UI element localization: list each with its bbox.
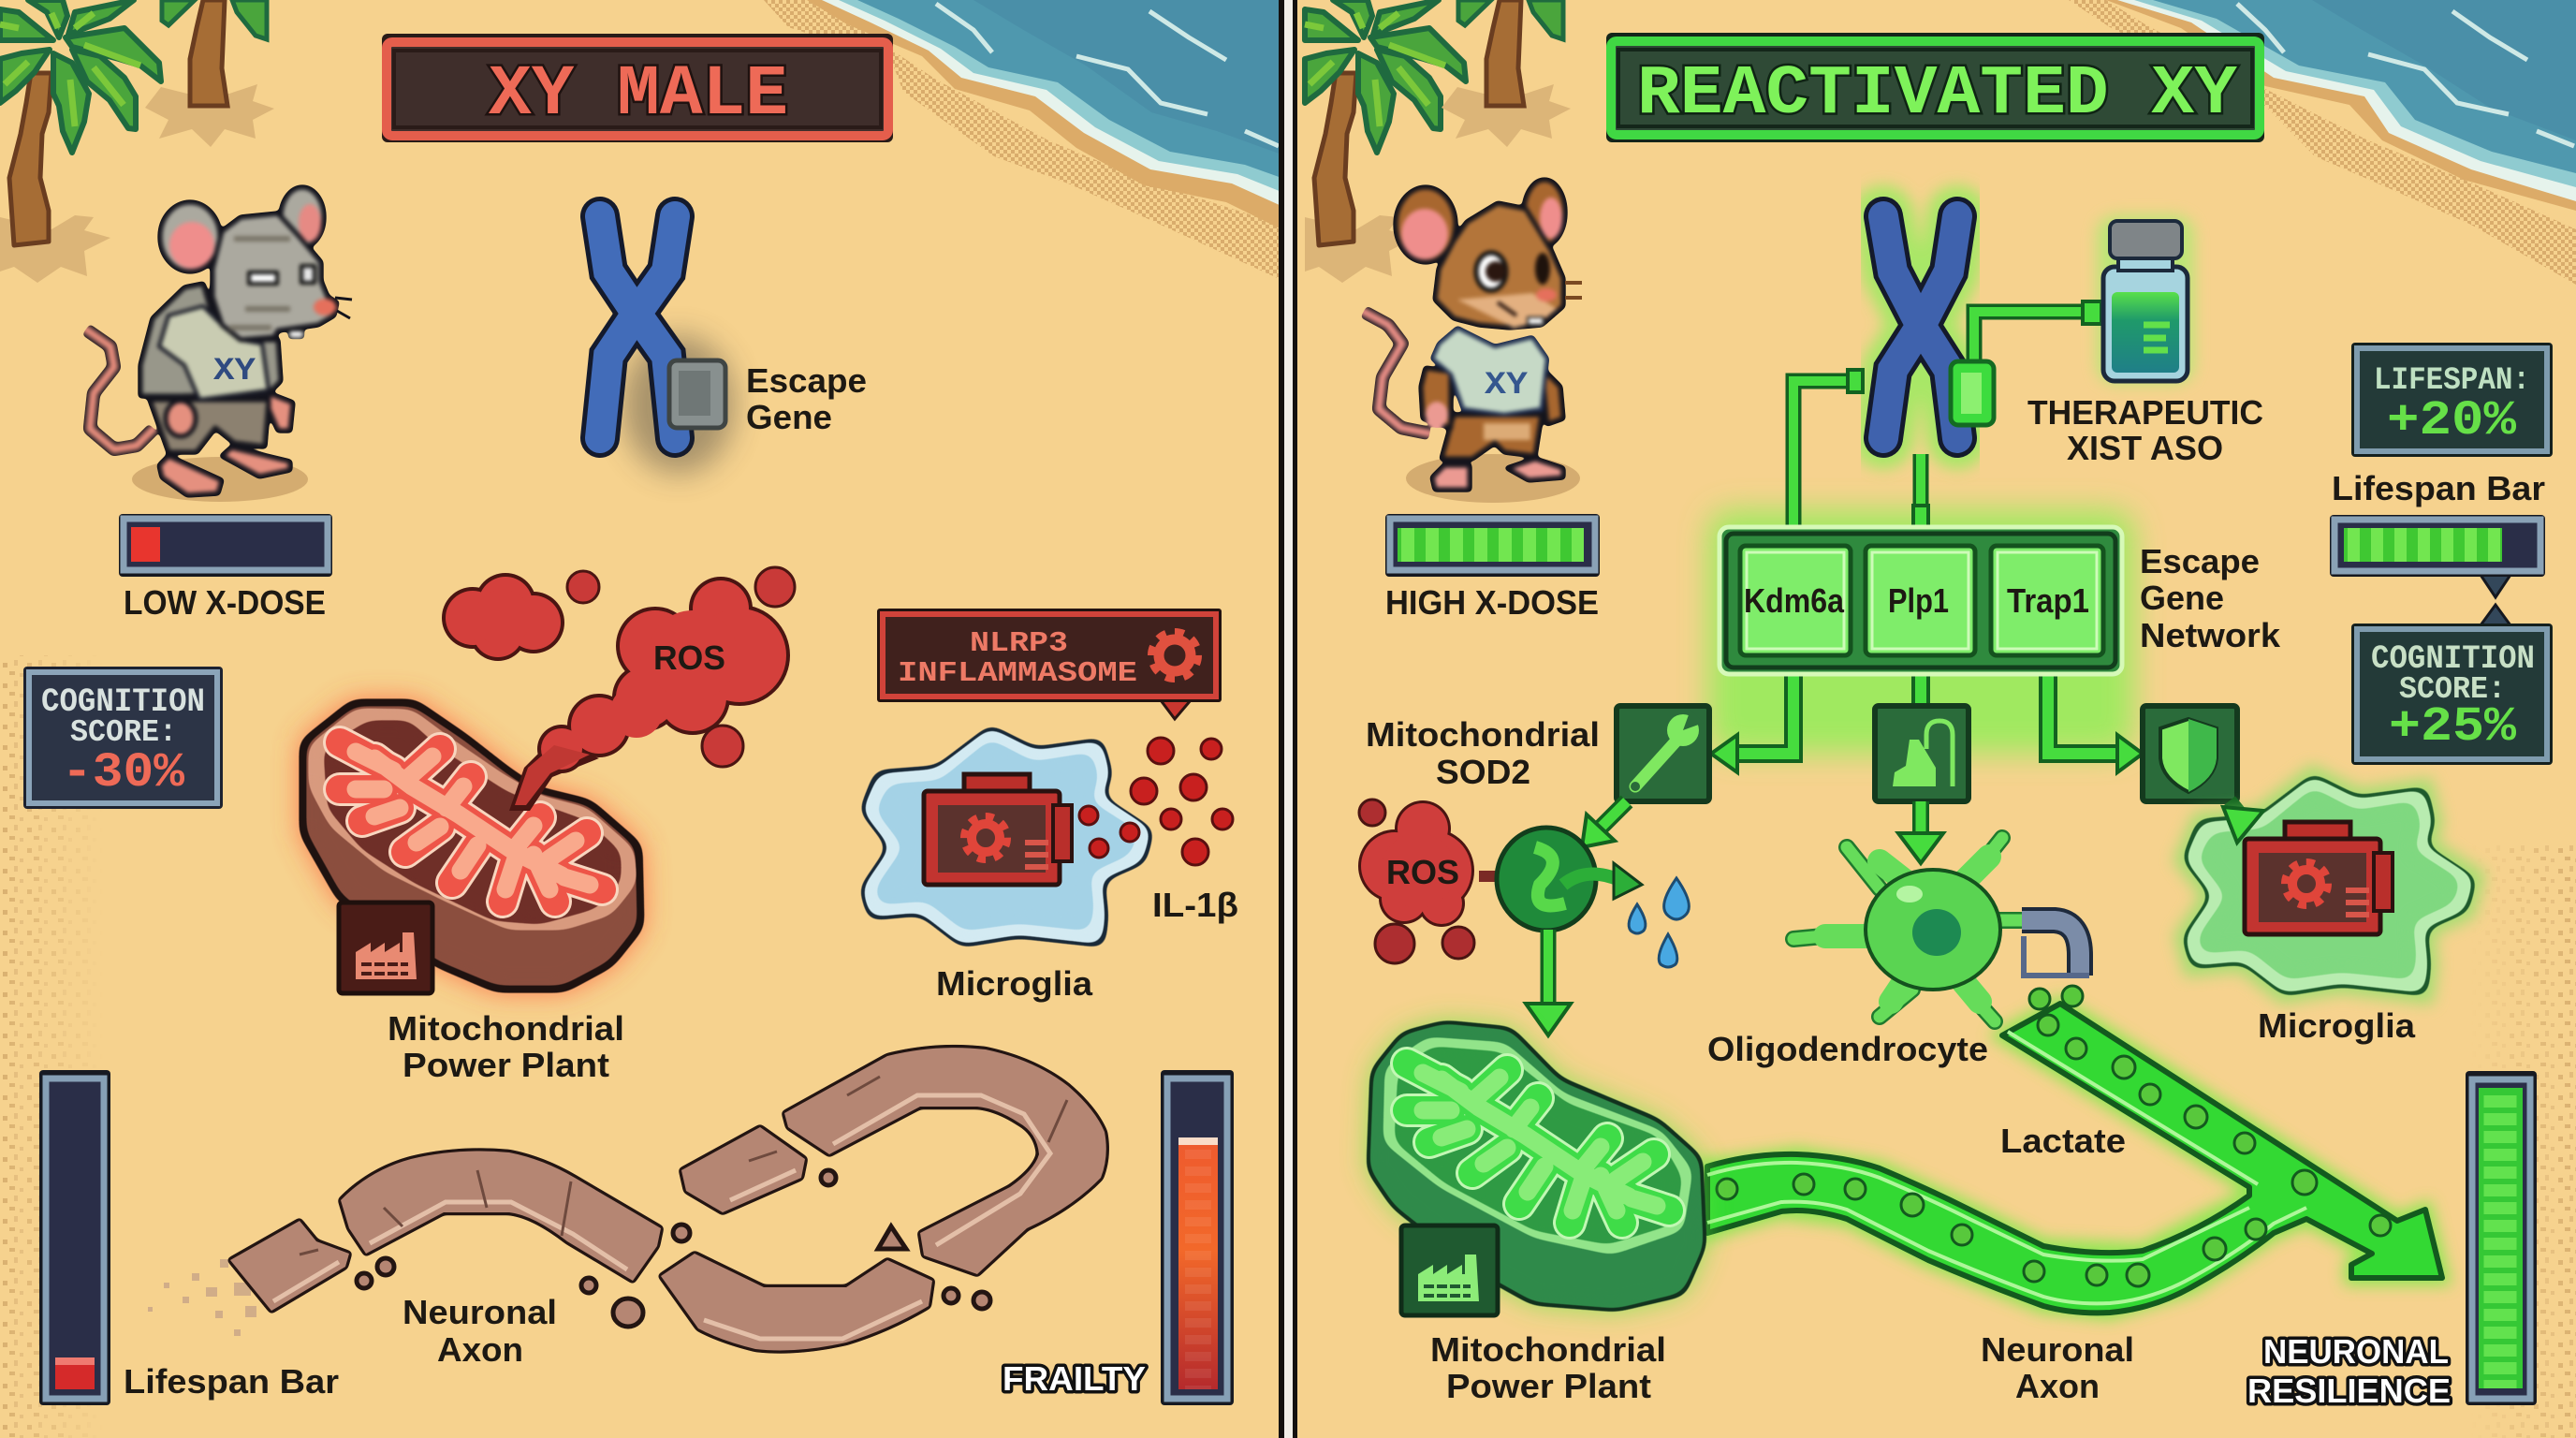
mitochondrial power plant healthy — [1367, 1020, 1706, 1312]
gene cell: Kdm6a: Kdm6a — [1744, 581, 1845, 620]
label: neuronal axon — [1981, 1330, 2134, 1405]
label: mitochondrial SOD2: Mitochondrial — [1366, 715, 1600, 754]
label: high x-dose: HIGH X-DOSE — [1385, 583, 1599, 622]
icon: myelin funnel — [1875, 706, 1969, 801]
NLRP3 inflammasome callout: INFLAMMASOME — [898, 657, 1137, 690]
label: escape gene — [747, 369, 866, 429]
lifespan score panel: +20% — [2387, 393, 2517, 448]
beach ocean corner — [2069, 0, 2576, 285]
IL-1β particles — [1079, 738, 1233, 865]
ROS cloud big with plume — [509, 577, 790, 811]
factory badge green — [1401, 1225, 1498, 1315]
ROS cloud neutralised — [1358, 800, 1507, 963]
label: escape gene network: Gene — [2140, 579, 2224, 617]
microglia cell inflamed — [859, 725, 1154, 947]
label: lactate: Lactate — [2000, 1122, 2126, 1160]
title: REACTIVATED XY — [1606, 33, 2264, 142]
mitochondrial power plant damaged — [302, 702, 641, 990]
label: neuronal axon: Neuronal — [402, 1293, 557, 1331]
sand speckle edge — [2471, 843, 2576, 1438]
label: oligodendrocyte: Oligodendrocyte — [1707, 1030, 1988, 1068]
label: escape gene network: Escape — [2140, 542, 2260, 580]
title: XY MALE: XY MALE — [489, 54, 788, 135]
fragmented neuronal axon — [148, 1048, 1106, 1350]
panel: reactivated XY — [1305, 0, 2576, 1438]
palm tree 2 right — [1442, 0, 1571, 147]
icon: gear — [1151, 632, 1198, 679]
cognition score panel: COGNITION — [41, 683, 205, 721]
label: neuronal axon: Neuronal — [1981, 1330, 2134, 1369]
panel: XY male — [0, 0, 1281, 1438]
label: microglia: Microglia — [2258, 1006, 2416, 1045]
label: escape gene: Escape — [746, 361, 867, 400]
gene cell: Trap1 — [1991, 546, 2103, 655]
x-dose bar high — [1385, 514, 1600, 577]
label: lifespan bar: Lifespan Bar — [2332, 469, 2545, 507]
mouse: aged grey male — [86, 187, 352, 502]
lactate tap — [2022, 920, 2089, 976]
lifespan score panel — [2351, 343, 2553, 457]
arrow: shield to microglia — [2229, 801, 2248, 826]
label: mitochondrial power plant: Mitochondrial — [388, 1009, 624, 1048]
label: frailty: FRAILTY — [1003, 1359, 1146, 1398]
oligodendrocyte cell — [1793, 838, 2022, 1021]
cognition score panel — [23, 667, 223, 809]
label: escape gene: Gene — [746, 398, 832, 436]
inflammasome machine — [924, 774, 1072, 885]
label: low x-dose: LOW X-DOSE — [124, 583, 326, 622]
shirt label: XY — [213, 354, 256, 389]
beach ocean corner — [764, 0, 1281, 280]
frailty bar vertical high — [1161, 1070, 1234, 1405]
cognition score panel: SCORE: — [70, 715, 177, 750]
palm tree 2 — [145, 0, 274, 147]
inflammasome machine resting — [2245, 822, 2393, 934]
arrow: wrench to SOD2 — [1582, 801, 1627, 847]
sand speckle edge — [3, 655, 79, 1438]
label: neuronal axon — [402, 1293, 557, 1369]
vial glow — [2097, 215, 2194, 384]
cognition score panel green — [2351, 605, 2553, 765]
gene cell: Plp1: Plp1 — [1888, 581, 1949, 620]
resilience bar vertical — [2466, 1071, 2537, 1405]
NLRP3 inflammasome callout — [877, 609, 1222, 719]
SOD2 enzyme — [1497, 828, 1642, 931]
cognition score panel: -30% — [62, 745, 185, 800]
reactivated neuronal axon with lactate flow — [1707, 986, 2442, 1313]
label: neuronal resilience: NEURONAL — [2263, 1332, 2449, 1371]
label: escape gene network — [2140, 542, 2281, 654]
label: escape gene network: Network — [2140, 616, 2281, 654]
label: neuronal resilience: RESILIENCE — [2247, 1372, 2451, 1410]
palm tree 1 right — [1305, 0, 1466, 283]
gene cell: Plp1 — [1866, 546, 1975, 655]
connectors from chromosome to network — [1793, 301, 2101, 528]
factory badge — [339, 902, 432, 993]
lifespan bar vertical low — [39, 1070, 110, 1405]
label: mitochondrial power plant — [1430, 1330, 1666, 1405]
network glow — [1708, 510, 2134, 754]
chromosome X reactivated — [1883, 216, 1957, 438]
cognition score panel green: SCORE: — [2399, 672, 2506, 707]
gene cell: Kdm6a — [1740, 546, 1851, 655]
icon: shield — [2143, 706, 2237, 801]
label: neuronal axon: Axon — [437, 1330, 523, 1369]
mitochondrion glow — [302, 702, 641, 990]
label: therapeutic XIST ASO: THERAPEUTIC — [2027, 393, 2263, 432]
lifespan bar horizontal — [2330, 515, 2545, 597]
label: microglia: Microglia — [936, 964, 1093, 1003]
label: ROS: ROS — [1386, 853, 1459, 891]
arrow: funnel to oligodendrocyte — [1898, 801, 1943, 863]
microglia cell resting — [2182, 773, 2477, 996]
cognition score panel green: +25% — [2389, 699, 2517, 755]
green glow behind X chromosome — [1883, 216, 1957, 438]
label: IL-1β: IL-1β — [1152, 886, 1238, 924]
label: mitochondrial power plant: Mitochondrial — [1430, 1330, 1666, 1369]
x-dose bar low — [119, 514, 332, 577]
gene cell: Trap1: Trap1 — [2007, 581, 2089, 620]
escape gene activated — [1951, 361, 1994, 425]
icon: wrench — [1617, 706, 1709, 801]
label: neuronal resilience — [2247, 1332, 2451, 1410]
palm tree 1 — [0, 0, 161, 283]
water droplets — [1629, 878, 1689, 967]
arrow: SOD2 to mitochondrion — [1526, 930, 1571, 1035]
divider — [1279, 0, 1297, 1438]
shirt label: XY — [1485, 368, 1529, 404]
NLRP3 inflammasome callout: NLRP3 — [970, 627, 1068, 660]
title: REACTIVATED XY: REACTIVATED XY — [1637, 55, 2238, 134]
label: mitochondrial power plant — [388, 1009, 624, 1084]
arrow head into microglia — [2223, 807, 2263, 843]
label: mitochondrial power plant: Power Plant — [402, 1046, 609, 1084]
lifespan score panel: LIFESPAN: — [2374, 363, 2530, 399]
cognition score panel green: COGNITION — [2371, 640, 2535, 678]
label: mitochondrial SOD2 — [1366, 715, 1600, 791]
mitochondrion glow healthy — [1370, 1024, 1703, 1308]
connectors from network to modules — [1711, 669, 2143, 772]
label: neuronal axon: Axon — [2015, 1367, 2100, 1405]
label: ROS: ROS — [653, 638, 725, 677]
title: XY MALE — [382, 34, 893, 142]
mouse: healthy brown reactivated — [1364, 180, 1582, 503]
chromosome X (inactive) — [600, 216, 735, 474]
label: therapeutic XIST ASO: XIST ASO — [2067, 429, 2223, 467]
label: lifespan bar: Lifespan Bar — [124, 1362, 339, 1401]
escape gene silent — [669, 360, 725, 428]
label: therapeutic XIST ASO — [2027, 393, 2263, 467]
label: mitochondrial power plant: Power Plant — [1446, 1367, 1651, 1405]
escape gene network — [1720, 527, 2122, 674]
therapeutic vial — [2103, 221, 2188, 381]
axon glow — [1707, 1004, 2442, 1313]
ROS cloud small — [442, 567, 795, 767]
label: mitochondrial SOD2: SOD2 — [1436, 753, 1530, 791]
